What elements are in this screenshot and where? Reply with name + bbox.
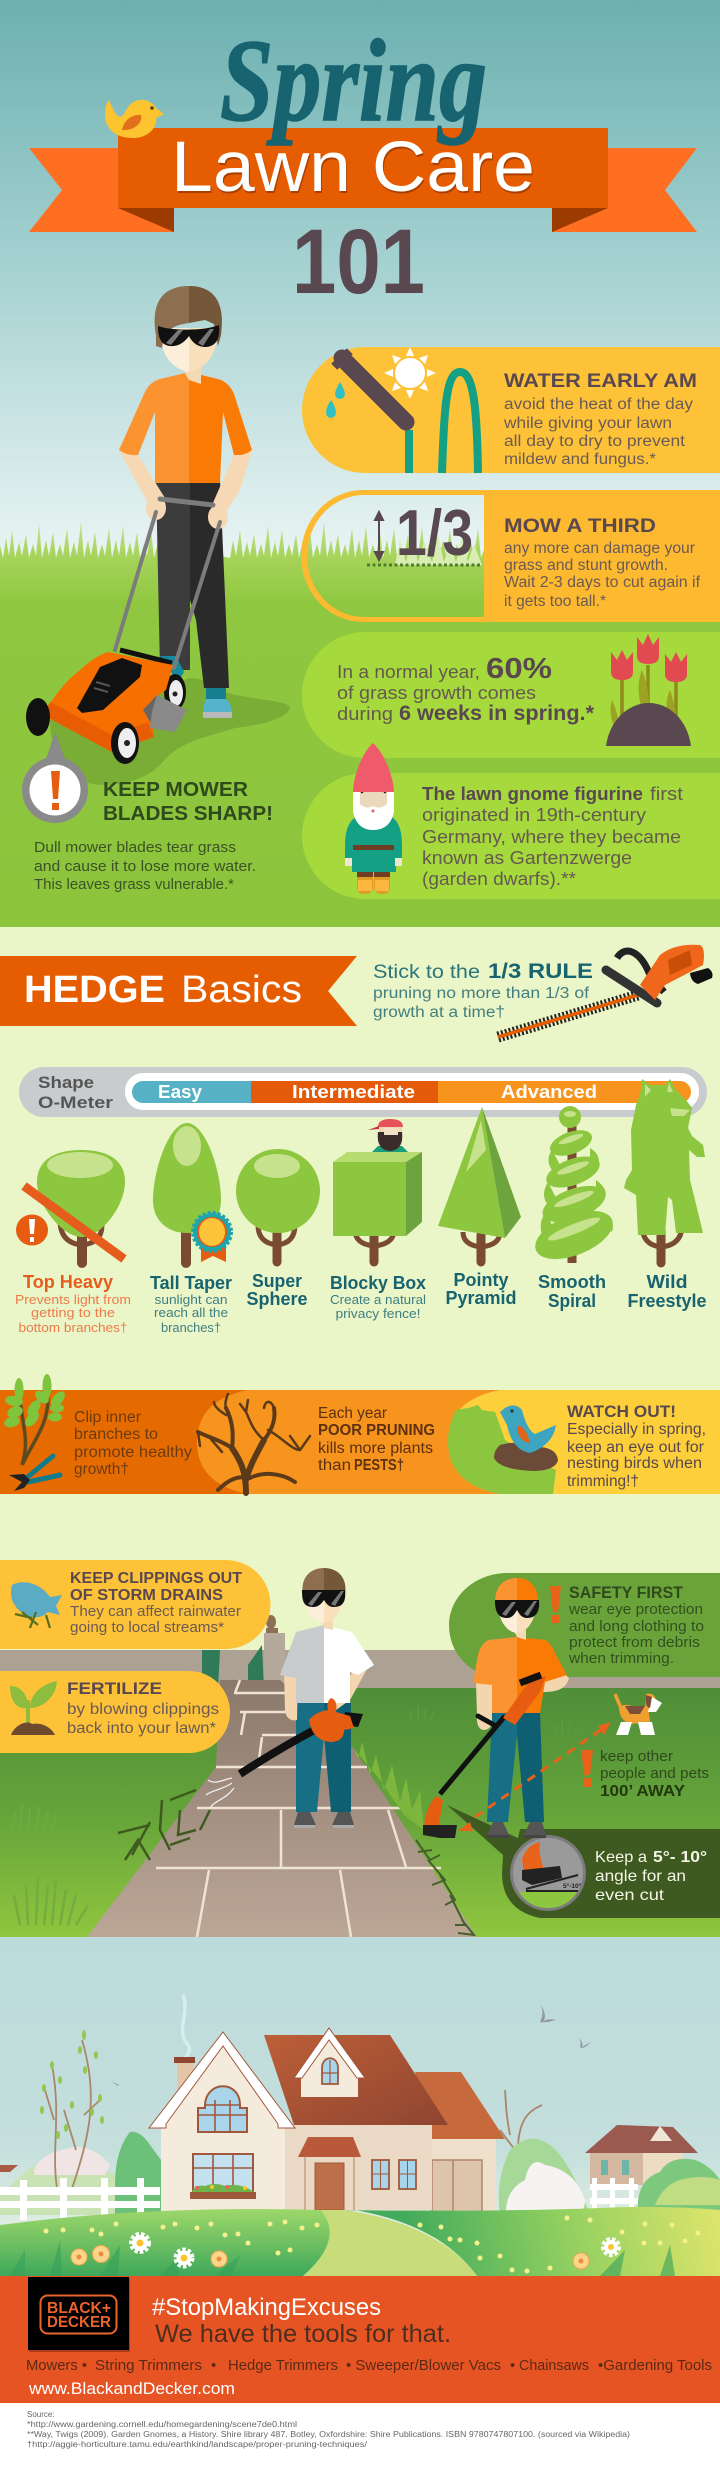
panel background: [0, 1671, 230, 1753]
Black+Decker logo: BLACK+: [47, 2300, 111, 2317]
flowering bush: [499, 2139, 590, 2215]
panel: keep clippings out of storm drains: [0, 1560, 270, 1649]
distance text: 100’ AWAY: [600, 1783, 685, 1800]
lawn shadow: [50, 678, 290, 785]
Black+Decker logo: DECKER: [47, 2314, 111, 2331]
body text: [34, 839, 256, 893]
footer background: [0, 2276, 720, 2403]
legs: [296, 1703, 324, 1812]
heading: [70, 1570, 242, 1604]
panel background: [302, 347, 720, 473]
house scene: [0, 1937, 720, 2276]
label: tall taper: sunlight can: [154, 1292, 228, 1307]
panel: lawn gnome fact: [302, 743, 720, 899]
product list: •Gardening Tools: [598, 2357, 712, 2374]
cut line: [367, 564, 482, 566]
statistic text: 60%: [486, 653, 552, 685]
text: poor pruning: POOR PRUNING: [318, 1422, 435, 1439]
wind lines: [206, 1778, 234, 1808]
source notes: Source:: [27, 2410, 55, 2419]
arms: [476, 1670, 569, 1730]
body text: and long clothing to: [569, 1619, 704, 1635]
body text: and cause it to lose more water.: [34, 858, 256, 875]
heading: BLADES SHARP!: [103, 803, 273, 825]
tree: super sphere: [236, 1149, 320, 1262]
panel: fertilize: [0, 1671, 230, 1753]
bearded gardener: [368, 1119, 408, 1152]
title: Spring: Spring: [220, 15, 487, 146]
grass blades foreground: [10, 2240, 675, 2276]
icon: tulips: [606, 634, 691, 746]
statistic text: of grass growth comes: [337, 683, 536, 703]
icon: exclamation: [581, 1750, 593, 1787]
1/3 rule callout: growth at a time†: [373, 1004, 505, 1021]
icon: twig with leaves: [3, 1374, 68, 1465]
band: poor pruning: [197, 1390, 500, 1494]
panel: water early AM: [302, 347, 720, 473]
body text: [504, 540, 701, 610]
bare trees: [45, 2040, 542, 2195]
label: smooth spiral: Spiral: [548, 1291, 596, 1311]
text: clip inner branches: [74, 1409, 192, 1478]
mower handle: [115, 499, 220, 668]
icon: water drops: [326, 382, 345, 418]
body text: back into your lawn*: [67, 1720, 216, 1737]
body text: They can affect rainwater: [70, 1604, 241, 1620]
garage wall: [432, 2139, 496, 2213]
label: top heavy: bottom branches†: [18, 1320, 128, 1335]
body text: Dull mower blades tear grass: [34, 839, 236, 856]
distance text: [600, 1748, 709, 1800]
neighbour house: [585, 2125, 698, 2185]
tree: top heavy: [16, 1150, 125, 1263]
sky: [0, 1937, 720, 2237]
title: 101: 101: [292, 211, 425, 313]
icon: hedge trimmer: [498, 945, 712, 1037]
pale cut grass: [395, 535, 482, 565]
sky background: [0, 0, 720, 570]
dormer: [294, 2028, 365, 2097]
angle detail circle: [510, 1835, 586, 1911]
icon: hose and nozzle: [339, 356, 478, 473]
label: pointy pyramid: Pointy: [454, 1270, 508, 1290]
icon: bird on nest in bush: [448, 1405, 558, 1494]
gnome fact text: The lawn gnome figurine: [422, 784, 643, 804]
garage door: [432, 2160, 482, 2213]
Black+Decker logo: [28, 2277, 130, 2352]
icon: sprout: [10, 1681, 57, 1735]
flower box: [190, 2184, 256, 2199]
arms: [120, 450, 252, 529]
legs: [487, 1713, 517, 1822]
clippings left: [118, 1790, 210, 1860]
angle text: Keep a: [595, 1849, 647, 1866]
text: poor pruning: than: [318, 1457, 351, 1474]
house: [149, 2028, 505, 2213]
icon: beagle dog: [615, 1694, 662, 1735]
icon: warning: [16, 1214, 48, 1246]
body text: going to local streams*: [70, 1620, 224, 1636]
body text: by blowing clippings: [67, 1701, 219, 1718]
heading: OF STORM DRAINS: [70, 1587, 223, 1604]
product list: Hedge Trimmers: [228, 2357, 338, 2374]
statistic text: In a normal year,: [337, 662, 480, 682]
pruning tips band: [0, 1374, 720, 1494]
body text: [503, 396, 693, 468]
label: smooth spiral: [538, 1272, 606, 1311]
head: [495, 1578, 539, 1640]
text: poor pruning: [318, 1405, 435, 1474]
figure: man with leaf blower: [206, 1568, 374, 1828]
gate pillar: [264, 1615, 285, 1690]
product list: String Trimmers: [95, 2357, 202, 2374]
label: blocky box: privacy fence!: [336, 1306, 420, 1321]
label: top heavy: getting to the: [31, 1305, 115, 1320]
right fence: [590, 2178, 638, 2214]
angle detail circle: 5°-10°: [563, 1882, 582, 1890]
text: watch out: keep an eye out for: [567, 1439, 704, 1456]
label: super sphere: [246, 1271, 308, 1309]
body text: mildew and fungus.*: [504, 451, 656, 468]
meter label: Shape: [38, 1073, 94, 1092]
panel: 60 percent grass growth: [302, 632, 720, 758]
figure: man pushing lawn mower: [26, 286, 290, 785]
band: clip inner branches: [0, 1390, 260, 1494]
icon: yellow bird: [105, 100, 164, 138]
label: pointy pyramid: Pyramid: [446, 1288, 516, 1308]
tree: tall taper: [153, 1123, 231, 1263]
right wall: [285, 2125, 432, 2210]
callout band: trimmer angle: [447, 1805, 720, 1918]
tree: pointy pyramid: [438, 1107, 521, 1262]
panel outline with cut-out: [301, 490, 720, 622]
meter label: O-Meter: [38, 1093, 113, 1112]
statistic text: during: [337, 704, 393, 724]
angle text: even cut: [595, 1887, 665, 1904]
heading: [103, 779, 273, 825]
text: watch out: Especially in spring,: [567, 1421, 706, 1438]
panel background: [0, 1560, 270, 1649]
1/3 rule callout: 1/3 RULE: [488, 960, 593, 983]
heading: KEEP MOWER: [103, 779, 249, 801]
keep people 100 feet away: [458, 1694, 709, 1831]
clippings right: [416, 1840, 474, 1935]
distant hills: [0, 2163, 115, 2215]
panel: safety first: [449, 1573, 720, 1677]
lawn with grass blades: [0, 522, 720, 927]
text: watch out: trimming!†: [567, 1473, 639, 1490]
title: Lawn Care: Lawn Care: [171, 128, 535, 207]
figure: man with string trimmer: [423, 1578, 569, 1838]
label: wild freestyle: [628, 1272, 706, 1311]
gnome fact text: first: [650, 784, 683, 804]
1/3 rule callout: Stick to the: [373, 961, 480, 983]
heading: KEEP CLIPPINGS OUT: [70, 1570, 242, 1587]
panel background: [302, 773, 720, 899]
orange shirt: [473, 1637, 517, 1713]
segment labels: [158, 1082, 597, 1102]
label: blocky box: [330, 1273, 426, 1321]
lower window: [193, 2154, 253, 2192]
title ribbon band: [118, 128, 608, 208]
callout: keep mower blades sharp: [22, 732, 273, 893]
segment labels: Easy: [158, 1082, 202, 1102]
meter track: [19, 1067, 707, 1117]
gable trim: [149, 2032, 295, 2128]
angle text: angle for an: [595, 1868, 686, 1885]
label: super sphere: Super: [252, 1271, 302, 1291]
shoes: [294, 1812, 354, 1828]
upper window: [198, 2086, 247, 2132]
head: [155, 286, 222, 384]
label: smooth spiral: Smooth: [538, 1272, 606, 1292]
band shape and pointer: [447, 1805, 720, 1918]
text: watch out: nesting birds when: [567, 1455, 702, 1472]
text: clip inner branches: growth†: [74, 1461, 129, 1478]
lawn: [0, 1688, 720, 1937]
segment: advanced: [438, 1081, 691, 1103]
product list: • Sweeper/Blower Vacs: [346, 2357, 501, 2374]
body text: protect from debris: [569, 1635, 700, 1651]
foreground left hill: [0, 2209, 330, 2276]
icon: alert bubble: [22, 732, 88, 823]
body text: wear eye protection: [568, 1602, 703, 1618]
daisies: [132, 2235, 618, 2266]
text: poor pruning: kills more plants: [318, 1440, 433, 1457]
icon: height arrow: [375, 512, 383, 560]
label: pointy pyramid: [446, 1270, 516, 1308]
foreground right hill: [321, 2207, 720, 2276]
gnome fact text: originated in 19th-century: [422, 805, 646, 825]
label: wild freestyle: Wild: [646, 1272, 688, 1292]
meter label: [38, 1073, 113, 1112]
orange shirt: [119, 372, 252, 483]
gnome fact text: known as Gartenzwerge: [422, 848, 632, 868]
body text: while giving your lawn: [503, 415, 672, 432]
segment labels: Advanced: [501, 1082, 597, 1102]
banner shape: [0, 956, 357, 1026]
tree: wild freestyle bear: [624, 1079, 705, 1263]
panel background: [449, 1573, 720, 1677]
banner title: [24, 969, 302, 1011]
body text: grass and stunt growth.: [504, 557, 668, 574]
label: super sphere: Sphere: [246, 1289, 308, 1309]
gnome fact text: (garden dwarfs).**: [422, 869, 576, 889]
grass tufts: [12, 1706, 578, 1925]
dashed distance arrow: [458, 1722, 611, 1831]
body text: Wait 2-3 days to cut again if: [504, 574, 701, 591]
label: tall taper: [150, 1273, 232, 1335]
text: watch out: [567, 1402, 706, 1490]
panel: mow a third: [301, 490, 720, 622]
1/3 numeral: 1/3: [396, 496, 473, 569]
product list: • Chainsaws: [510, 2357, 589, 2374]
distance text: keep other: [600, 1748, 673, 1765]
hashtag: #StopMakingExcuses: [152, 2294, 381, 2321]
angle text: 5°- 10°: [653, 1849, 707, 1866]
text: clip inner branches: promote healthy: [74, 1444, 192, 1461]
label: top heavy: [15, 1272, 131, 1335]
body text: all day to dry to prevent: [504, 433, 686, 450]
string trimmer: [423, 1675, 546, 1838]
orange flowers: [71, 2246, 589, 2269]
hedge basics banner: [0, 956, 357, 1026]
lawn mower: [26, 650, 187, 764]
icon: bare tree: [198, 1394, 310, 1493]
1/3 rule callout: [373, 960, 593, 1021]
label: top heavy: Prevents light from: [15, 1292, 131, 1307]
website: www.BlackandDecker.com: [28, 2379, 235, 2398]
label: wild freestyle: Freestyle: [628, 1291, 706, 1311]
icon: pruning shears: [9, 1456, 60, 1491]
head: [302, 1568, 346, 1630]
title ribbon tails: [29, 148, 697, 232]
product list: Mowers •: [26, 2357, 87, 2374]
body text: when trimming.: [568, 1651, 674, 1667]
text: watch out: WATCH OUT!: [567, 1402, 676, 1421]
garden path: [303, 2210, 477, 2276]
tagline: We have the tools for that.: [155, 2320, 451, 2348]
left fence: [0, 2178, 160, 2220]
body text: [70, 1604, 241, 1636]
text: poor pruning: Each year: [318, 1405, 387, 1422]
label: tall taper: branches†: [161, 1320, 221, 1335]
main roof: [264, 2035, 448, 2125]
source notes: *http://www.gardening.cornell.edu/homegardening/scene7de0.html: [27, 2420, 297, 2429]
source notes: [27, 2410, 630, 2449]
body text: any more can damage your: [504, 540, 695, 557]
chimney: [174, 2057, 195, 2090]
leaf blower: [240, 1698, 363, 1774]
gable wall: [161, 2045, 285, 2212]
shape-o-meter: [19, 1067, 707, 1117]
legs: [156, 480, 232, 718]
heading: WATER EARLY AM: [504, 370, 697, 392]
segment: intermediate: [251, 1081, 438, 1103]
heading: FERTILIZE: [67, 1679, 162, 1698]
small yellow flowers: [44, 2216, 700, 2274]
grass along walkway: [350, 1735, 424, 1830]
statistic text: [337, 653, 595, 725]
tree: smooth spiral: [528, 1106, 620, 1269]
statistic text: 6 weeks in spring.*: [399, 702, 595, 725]
walkway: [87, 1680, 477, 1937]
heading: MOW A THIRD: [504, 515, 656, 537]
title block: [29, 15, 697, 313]
gnome fact text: Germany, where they became: [422, 827, 681, 847]
arms: [284, 1660, 372, 1720]
label: blocky box: Blocky Box: [330, 1273, 426, 1293]
body text: [568, 1602, 704, 1667]
label: tall taper: reach all the: [154, 1305, 228, 1320]
text: poor pruning: PESTS†: [354, 1457, 404, 1474]
segment: easy: [132, 1081, 251, 1103]
icon: sun: [384, 347, 436, 399]
product list: [26, 2357, 712, 2374]
source notes: †http://aggie-horticulture.tamu.edu/earthkind/landscape/proper-pruning-techniques/: [27, 2440, 368, 2449]
body text: avoid the heat of the day: [504, 396, 693, 413]
panel background: [302, 632, 720, 758]
gnome fact text: [422, 784, 683, 889]
shoes: [487, 1822, 546, 1838]
1/3 rule callout: pruning no more than 1/3 of: [373, 985, 590, 1002]
text: clip inner branches: Clip inner: [74, 1409, 141, 1426]
smoke: [182, 1995, 190, 2066]
right bushes: [638, 2159, 720, 2215]
heading: SAFETY FIRST: [569, 1584, 683, 1602]
source notes: **Way, Twigs (2009). Garden Gnomes, a History. Shire library 487. Botley, Oxfordshire: Shire Publications. ISBN 9780747807100. (sourced via Wikipedia): [27, 2430, 630, 2439]
distance text: people and pets: [600, 1765, 709, 1782]
icon: garden gnome: [345, 743, 402, 894]
tree: blocky box: [333, 1119, 422, 1262]
small roof at left edge: [0, 2165, 18, 2172]
footer: [0, 2276, 720, 2403]
body text: [67, 1701, 219, 1737]
banner title: Basics: [181, 969, 302, 1011]
spring buds: [40, 2030, 104, 2139]
side windows: [372, 2160, 416, 2189]
white shirt: [280, 1625, 324, 1703]
product list: •: [211, 2357, 216, 2374]
garden wall: [0, 1650, 720, 1689]
walkway joints: [156, 1680, 441, 1937]
gate shrubs: [202, 1645, 264, 1690]
icon: award ribbon: [193, 1213, 231, 1262]
no sign slash: [24, 1186, 124, 1259]
angle text: [595, 1849, 707, 1904]
title: Lawn Care: Lawn Care: [172, 130, 536, 209]
text: clip inner branches: branches to: [74, 1426, 158, 1443]
door: [305, 2157, 354, 2210]
band: watch out: [448, 1390, 720, 1494]
banner title: HEDGE: [24, 969, 165, 1011]
garage roof: [415, 2072, 505, 2139]
awning: [298, 2137, 361, 2157]
icon: fish and clippings: [11, 1582, 62, 1628]
label: top heavy: Top Heavy: [23, 1272, 113, 1292]
body text: This leaves grass vulnerable.*: [34, 876, 234, 893]
icon: exclamation: [550, 1586, 561, 1623]
left bush: [115, 2132, 161, 2215]
lower page background: [0, 927, 720, 1937]
birds: [111, 2004, 591, 2086]
label: blocky box: Create a natural: [330, 1292, 426, 1307]
segment labels: Intermediate: [292, 1082, 415, 1102]
body text: it gets too tall.*: [504, 593, 606, 610]
label: tall taper: Tall Taper: [150, 1273, 232, 1293]
yard scene: [0, 1615, 720, 1937]
